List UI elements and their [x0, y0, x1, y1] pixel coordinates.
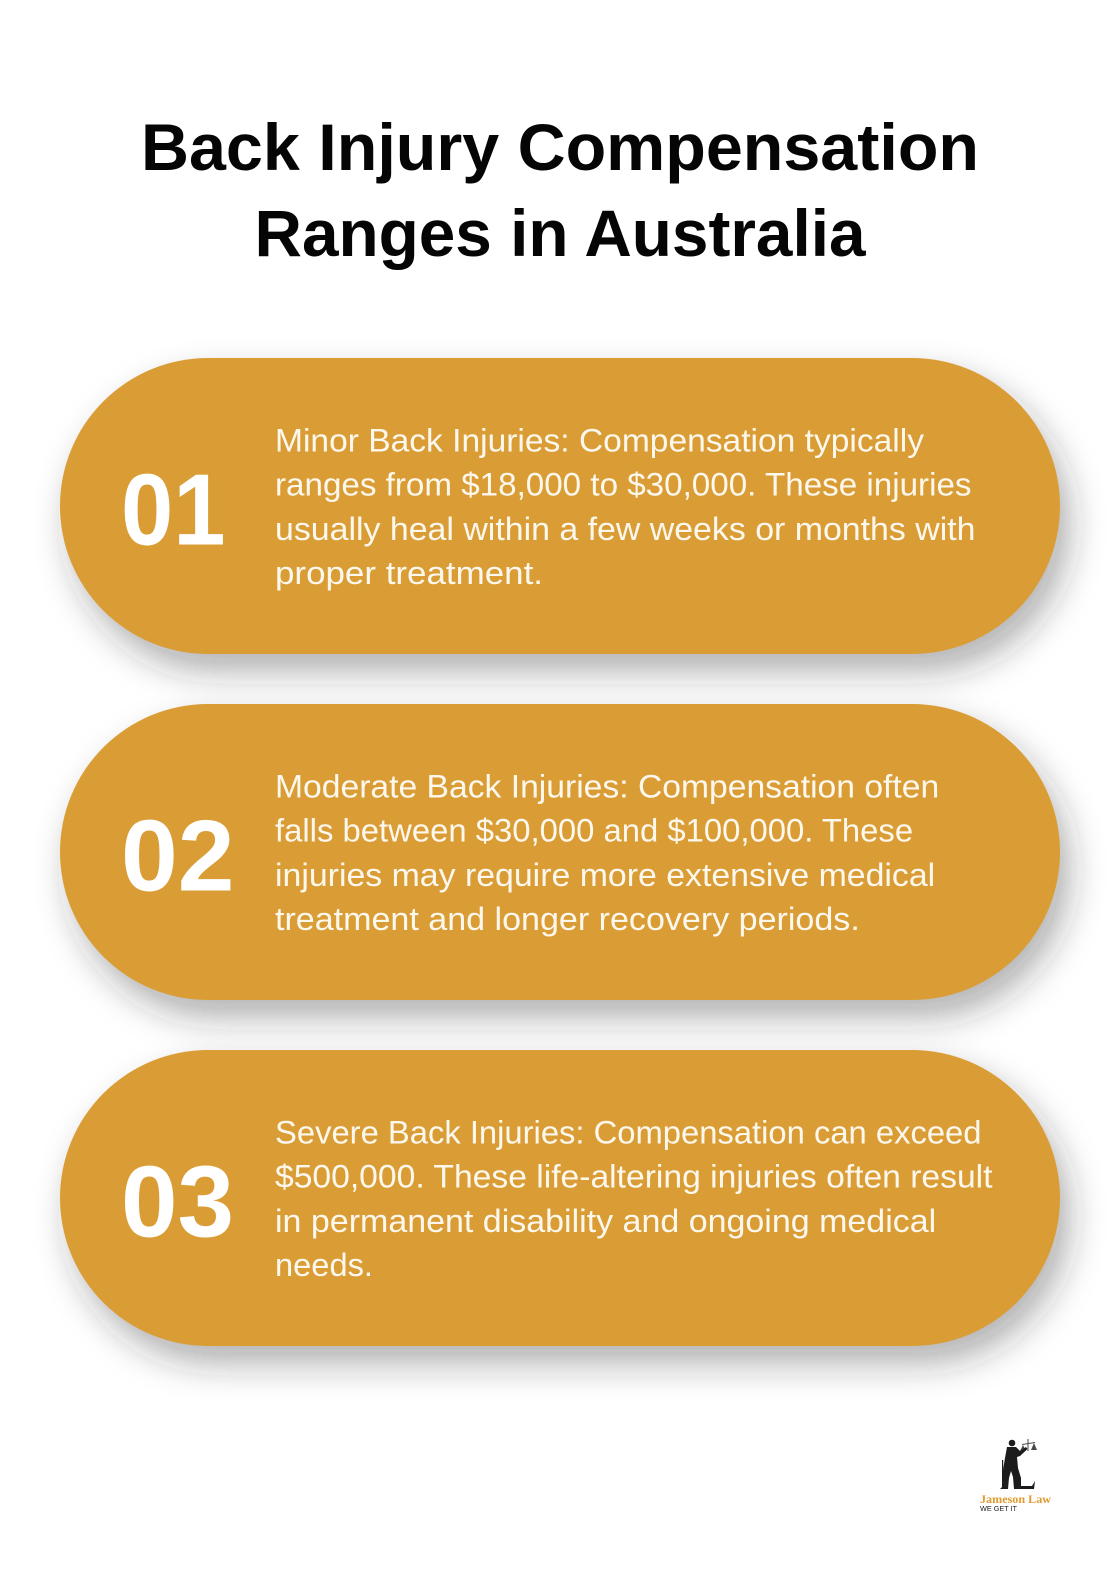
description: severe: needs.	[275, 1247, 373, 1283]
description: moderate	[275, 768, 939, 937]
pill shadow	[70, 1068, 1070, 1364]
panel: minor back injuries	[60, 358, 1070, 672]
step number 01: 01	[121, 454, 226, 566]
title: Back Injury Compensation	[141, 111, 979, 184]
description: moderate: injuries may require more extensive medical	[275, 857, 935, 893]
pill shadow	[70, 376, 1070, 672]
pill background	[60, 704, 1060, 1000]
description: minor: proper treatment.	[275, 555, 543, 591]
description: severe: $500,000. These life-altering injuries often result	[275, 1159, 993, 1195]
title: Ranges in Australia	[254, 197, 866, 270]
title	[141, 111, 979, 270]
description: moderate: treatment and longer recovery periods.	[275, 901, 860, 937]
icon: lady justice	[1000, 1439, 1037, 1489]
description: severe: in permanent disability and ongoing medical	[275, 1203, 936, 1239]
pill background	[60, 1050, 1060, 1346]
logo tagline: WE GET IT	[980, 1504, 1017, 1513]
step number 03: 03	[121, 1146, 234, 1258]
pill shadow	[70, 722, 1070, 1018]
step number 02: 02	[121, 800, 234, 912]
description: moderate: Moderate Back Injuries: Compensation often	[275, 768, 939, 804]
logo name: Jameson Law	[980, 1494, 1052, 1506]
description: minor: ranges from $18,000 to $30,000. These injuries	[275, 467, 972, 503]
pill background	[60, 358, 1060, 654]
description: minor: usually heal within a few weeks or months with	[275, 511, 976, 547]
description: moderate: falls between $30,000 and $100,000. These	[275, 813, 913, 849]
description: minor: Minor Back Injuries: Compensation typically	[275, 422, 925, 458]
description: severe	[275, 1114, 993, 1283]
description: severe: Severe Back Injuries: Compensation can exceed	[275, 1114, 982, 1150]
panel: severe back injuries	[60, 1050, 1070, 1364]
panel: moderate back injuries	[60, 704, 1070, 1018]
logo: Jameson Law	[980, 1439, 1052, 1513]
description: minor	[275, 422, 976, 591]
